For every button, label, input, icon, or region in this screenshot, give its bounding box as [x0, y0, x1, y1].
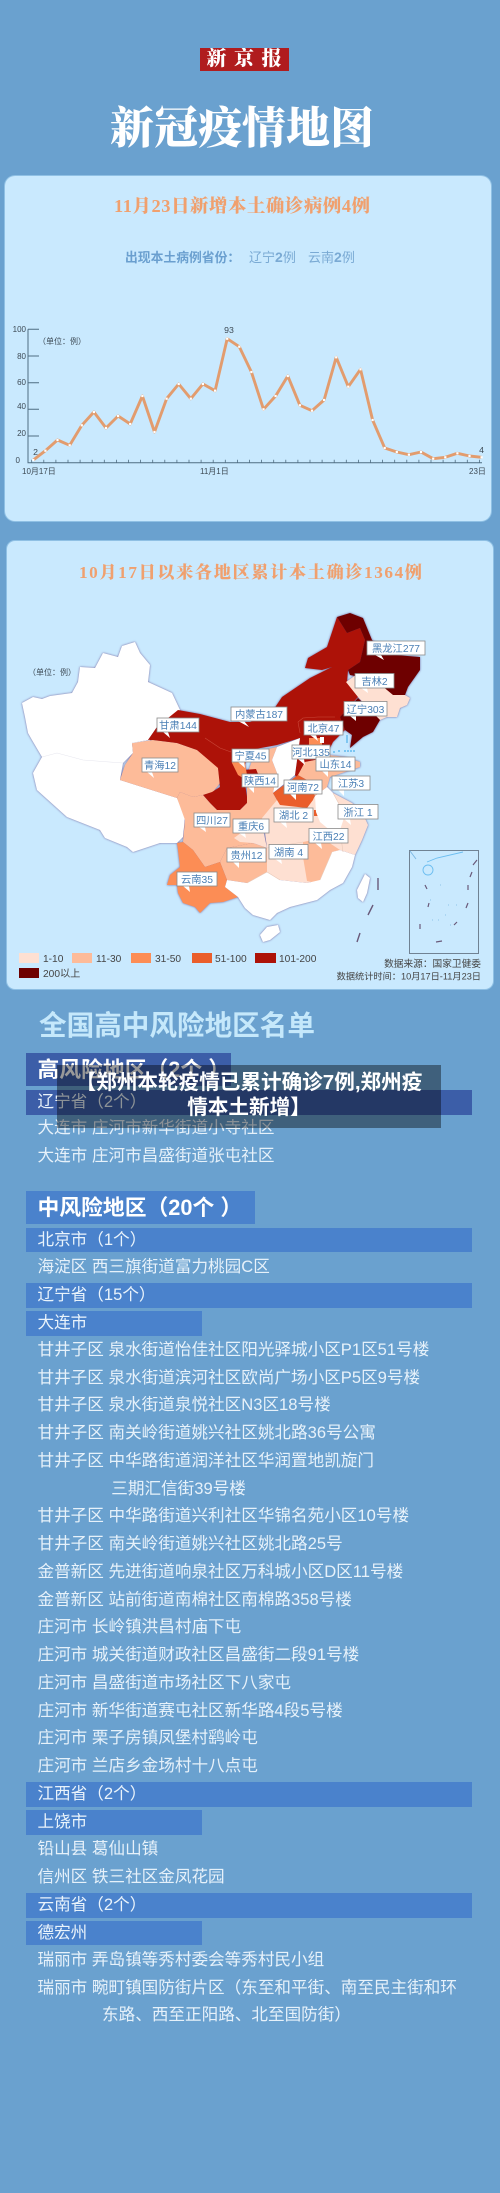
label: 辽宁: 辽宁303: [347, 703, 385, 716]
panel: cumulative map: [7, 541, 493, 989]
logo: 新京报: 新京报: [206, 48, 289, 70]
inset: South China Sea: [410, 850, 478, 954]
line chart: daily cases: 0: [16, 456, 21, 465]
label: 重庆: 重庆6: [238, 820, 264, 833]
bar: medium risk areas: [26, 1191, 255, 1224]
data source note: 数据来源：国家卫健委: [384, 957, 481, 970]
label: 湖南: [269, 844, 308, 864]
line chart: daily cases: [13, 325, 486, 476]
label: 浙江: [338, 804, 378, 825]
bar: Beijing: 北京市（1个）: [38, 1230, 146, 1248]
line chart: daily cases: 10月17日: [22, 467, 56, 476]
label: 河北: 河北135: [292, 747, 330, 759]
line chart: daily cases: 40: [17, 402, 27, 411]
label: 北京: 北京47: [307, 722, 340, 735]
bar: Beijing: [26, 1228, 472, 1252]
label: 湖北: 湖北 2: [279, 810, 308, 822]
label: 云南: [177, 872, 217, 892]
bar: medium risk areas: 中风险地区（20个 ）: [38, 1195, 242, 1220]
legend: 1-10: [43, 954, 64, 965]
label: 宁夏: 宁夏45: [234, 750, 267, 762]
caption overlay: 情本土新增】: [187, 1096, 311, 1118]
legend: [19, 953, 317, 980]
bar: Liaoning medium: 辽宁省（15个）: [38, 1285, 156, 1304]
title: 新冠疫情地图: [110, 104, 374, 153]
label: 宁夏: [232, 749, 269, 768]
line chart: daily cases: 23日: [469, 467, 486, 476]
legend: 200以上: [43, 968, 80, 980]
label: 山东: [316, 757, 355, 777]
list: Shangrao communities: 铅山县 葛仙山镇 信州区 铁三社区金凤花园: [38, 1839, 225, 1886]
unit note: （单位：例）: [28, 667, 76, 677]
bar: Liaoning high: 辽宁省（2个）: [38, 1092, 146, 1111]
label: 黑龙江: 黑龙江277: [372, 642, 420, 655]
bar: Yunnan: 云南省（2个）: [38, 1895, 146, 1914]
map of China: [22, 613, 420, 942]
list: Beijing community: 海淀区 西三旗街道富力桃园C区: [38, 1257, 270, 1276]
bar: high risk areas: 高风险地区（2个 ）: [38, 1057, 230, 1082]
caption overlay: 【郑州本轮疫情已累计确诊7例,郑州疫: [76, 1071, 422, 1094]
legend: 101-200: [279, 954, 317, 965]
bar: Liaoning medium: [26, 1283, 472, 1308]
caption overlay: [57, 1065, 441, 1128]
line chart: daily cases: 100: [13, 325, 27, 334]
line chart: daily cases: 93: [224, 325, 234, 335]
provinces line: 云南2例: [308, 249, 355, 265]
label: 云南: 云南35: [181, 873, 213, 886]
label: 江西: 江西22: [312, 831, 345, 843]
panel heading: 10月17日以来各地区累计本土确诊1364例: [79, 562, 422, 582]
label: 吉林: 吉林2: [361, 675, 388, 688]
bar: Liaoning high: [26, 1090, 472, 1114]
label: 湖南: 湖南 4: [274, 846, 303, 859]
label: 江西: [309, 828, 348, 849]
bar: Shangrao: 上饶市: [38, 1812, 87, 1831]
line chart: daily cases: 2: [33, 447, 38, 457]
label: 浙江: 浙江 1: [343, 807, 373, 819]
label: 河南: [284, 780, 322, 800]
line chart: daily cases: 4: [479, 445, 484, 455]
label: 四川: [194, 813, 230, 832]
bar: Jiangxi: 江西省（2个）: [38, 1784, 146, 1803]
legend: 11-30: [96, 954, 122, 965]
label: 河北: [292, 745, 330, 765]
list: Dehong communities: 瑞丽市 弄岛镇等秀村委会等秀村民小组 瑞丽市 畹町镇国防街片区（东至和平街、南至民主街和环 东路、西至正阳路、北至国防街）: [38, 1950, 457, 2024]
label: 辽宁: [344, 702, 387, 721]
label: 四川: 四川27: [196, 815, 228, 827]
provinces line: 辽宁2例: [249, 249, 296, 265]
bar: Dalian: [26, 1311, 202, 1336]
provinces line: 出现本土病例省份：: [125, 250, 240, 265]
label: 江苏: [332, 776, 370, 796]
bar: Dehong: [26, 1920, 202, 1945]
label: 内蒙古: 内蒙古187: [235, 708, 283, 721]
bar: Shangrao: [26, 1810, 202, 1834]
label: 青海: [142, 758, 178, 778]
provinces line: [125, 249, 355, 265]
line chart: daily cases: 60: [17, 378, 27, 387]
label: 贵州: 贵州12: [230, 849, 263, 862]
label: 江苏: 江苏3: [338, 777, 364, 790]
bar: Dalian: 大连市: [38, 1313, 87, 1332]
label: 黑龙江: [367, 641, 425, 660]
bar: Jiangxi: [26, 1782, 472, 1806]
panel heading: 11月23日新增本土确诊病例4例: [114, 195, 370, 216]
label: 甘肃: 甘肃144: [159, 719, 197, 732]
line chart: daily cases: 20: [17, 429, 27, 438]
line chart: daily cases: （单位：例）: [38, 336, 86, 346]
data source note: [337, 957, 481, 982]
panel: daily new cases: [5, 176, 491, 521]
label: 重庆: [233, 819, 269, 838]
line chart: daily cases: 11月1日: [200, 467, 229, 476]
label: 内蒙古: [231, 707, 287, 727]
label: 青海: 青海12: [144, 759, 176, 772]
data source note: 数据统计时间：10月17日-11月23日: [337, 970, 481, 982]
section heading: risk area list: 全国高中风险地区名单: [39, 1010, 315, 1041]
legend: 31-50: [155, 954, 181, 965]
list: high risk communities: 大连市 庄河市新华街道小寺社区 大连市 庄河市昌盛街道张屯社区: [38, 1118, 274, 1165]
label: 湖北: [274, 808, 313, 828]
label: 甘肃: [157, 718, 199, 738]
label: 陕西: 陕西14: [244, 774, 276, 788]
label: 河南: 河南72: [287, 781, 319, 794]
label: 贵州: [227, 848, 266, 868]
label: 陕西: [242, 774, 278, 793]
label: 吉林: [355, 674, 394, 693]
label: 北京: [304, 721, 343, 741]
label: 山东: 山东14: [319, 758, 352, 771]
bar: Dehong: 德宏州: [38, 1922, 87, 1942]
line chart: daily cases: 80: [17, 352, 27, 361]
list: Dalian communities: 甘井子区 泉水街道怡佳社区阳光驿城小区P1区51号楼 甘井子区 泉水街道滨河社区欧尚广场小区P5区9号楼 甘井子区 泉水街道泉悦社区N3区18号楼 甘井子区 南关岭街道姚兴社区姚北路36号公寓 甘井子区 中华路街道润洋社区华润置地凯旋门 三期汇信街39号楼 甘井子区 中华路街道兴利社区华锦名苑小区10号楼 甘井子区 南关岭街道姚兴社区姚北路25号 金普新区 先进街道响泉社区万科城小区D区11号楼 金普新区 站前街道南棉社区南棉路358号楼 庄河市 长岭镇洪昌村庙下屯 庄河市 城关街道财政社区昌盛街二段91号楼 庄河市 昌盛街道市场社区下八家屯 庄河市 新华街道赛屯社区新华路4段5号楼 庄河市 栗子房镇凤堡村鹞岭屯 庄河市 兰店乡金场村十八点屯: [38, 1340, 429, 1775]
bar: Yunnan: [26, 1893, 472, 1918]
legend: 51-100: [215, 954, 247, 965]
